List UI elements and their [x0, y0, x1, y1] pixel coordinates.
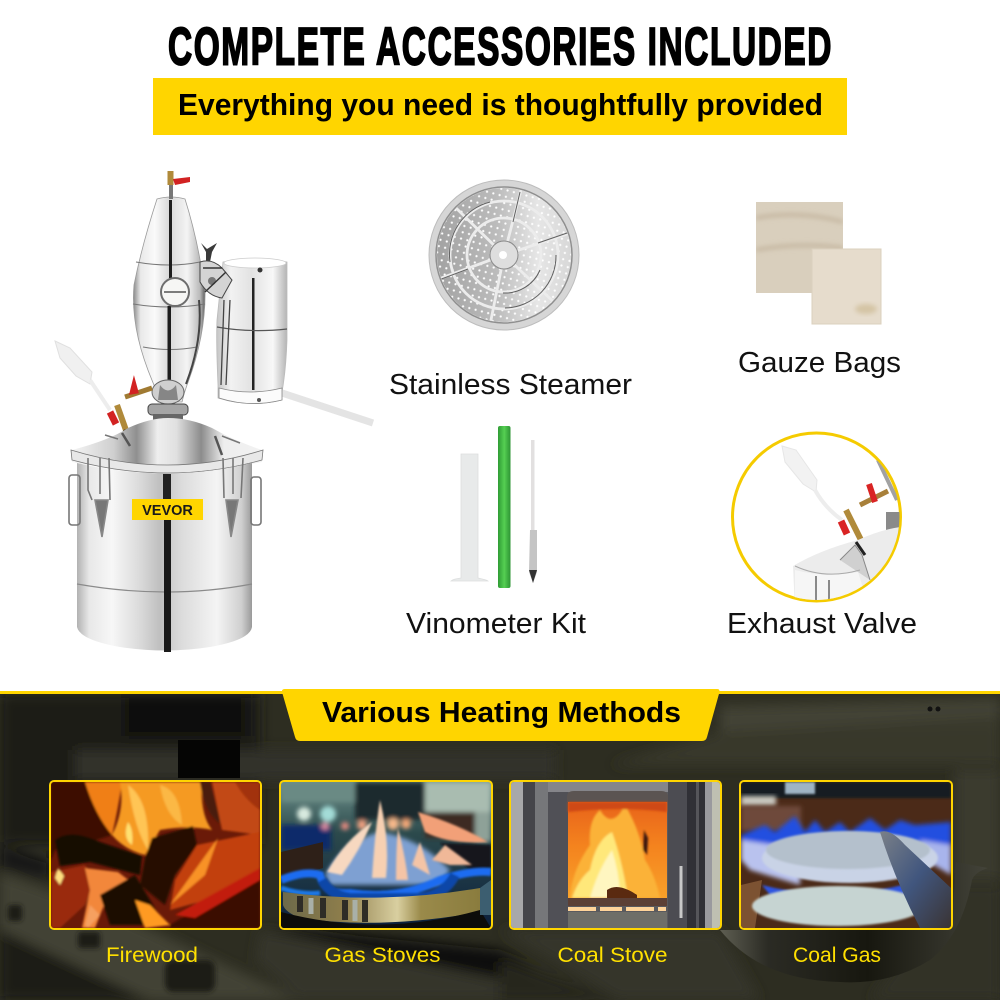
gauze bags label: Gauze Bags [738, 347, 901, 379]
label: coal stove: Coal Stove [558, 944, 668, 967]
condenser [217, 258, 287, 404]
subtitle banner: Everything you need is thoughtfully provided [178, 87, 823, 122]
latches [69, 458, 261, 537]
kitchen background [0, 694, 1000, 1000]
exhaust valve circular inset [732, 433, 900, 610]
heating methods panel [0, 689, 1000, 1000]
measuring cylinder [451, 454, 488, 581]
subtitle banner [153, 78, 847, 135]
thermometer gauge [161, 278, 189, 306]
pot bowl in background [720, 862, 988, 982]
exhaust valve label: Exhaust Valve [727, 608, 917, 640]
top valve [168, 171, 190, 199]
label: coal gas: Coal Gas [793, 944, 881, 967]
stainless steamer label: Stainless Steamer [389, 369, 632, 401]
section banner [282, 689, 720, 741]
hydrometer [529, 440, 537, 583]
still column [133, 197, 205, 404]
top rule [0, 691, 1000, 694]
clamp and wing nut [200, 243, 232, 298]
card: coal stove photo [509, 780, 722, 930]
card: coal gas photo [739, 780, 953, 930]
section banner: Various Heating Methods [322, 697, 681, 729]
outlet hose [282, 393, 373, 423]
label: gas stoves: Gas Stoves [324, 944, 440, 967]
pot dome lid [71, 418, 263, 473]
card: gas stove photo [279, 780, 493, 930]
airlock and exhaust tube [55, 341, 110, 410]
vinometer kit label: Vinometer Kit [406, 608, 586, 640]
green tube [498, 426, 510, 588]
neck clamp [148, 404, 188, 424]
knobs in background [8, 905, 215, 992]
label: firewood: Firewood [106, 944, 198, 967]
card: firewood photo [49, 780, 262, 930]
stainless steamer image [429, 180, 579, 330]
steamer ribs [440, 190, 568, 321]
distiller product image [55, 171, 373, 652]
exhaust valve [110, 405, 130, 438]
pot body [77, 463, 252, 652]
gauze bags image [756, 202, 881, 324]
VEVOR logo label: VEVOR [142, 503, 193, 519]
vinometer kit image [451, 426, 537, 588]
VEVOR logo label [132, 499, 203, 520]
side valve [125, 381, 152, 397]
